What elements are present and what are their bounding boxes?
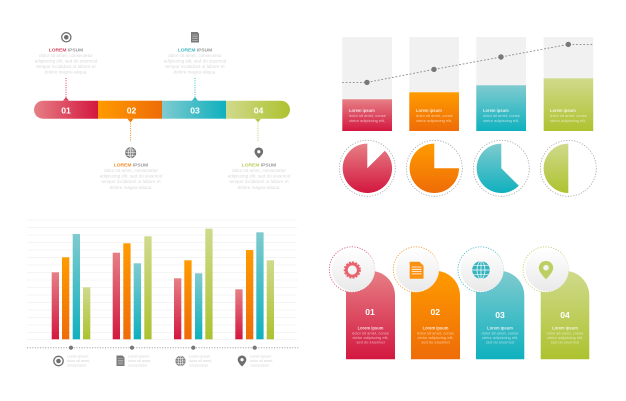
arch card 01: dolor sit amet, conse bbox=[352, 330, 390, 335]
legend item: target bbox=[54, 354, 90, 368]
legend item: map pin: dolor sit amet, bbox=[250, 359, 273, 363]
card 3: Lorem ipsum bbox=[483, 108, 509, 113]
legend item: document bbox=[116, 354, 151, 368]
arch card 02: Lorem ipsum bbox=[423, 326, 449, 330]
card 2: Lorem ipsum bbox=[416, 108, 442, 113]
panel: column cards with trend line bbox=[342, 37, 593, 131]
arch card 02: ctetur adipiscing elit, bbox=[417, 335, 454, 340]
arch card 04: ctetur adipiscing elit, bbox=[547, 335, 583, 340]
arch card 03 bbox=[476, 271, 524, 359]
text block 03: dolore magna aliqua. bbox=[174, 70, 216, 75]
text block 02: tempor incididunt ut labore et bbox=[101, 179, 161, 184]
pie 1 bbox=[339, 140, 395, 196]
legend item: target: dolor sit amet, bbox=[67, 359, 90, 363]
timeline bar bbox=[34, 101, 290, 119]
text block 01 bbox=[35, 47, 98, 75]
pie 4 bbox=[540, 140, 596, 196]
arch card 02 bbox=[411, 271, 460, 359]
connector 04 bbox=[255, 119, 261, 142]
arch card 02: dolor sit amet, conse bbox=[417, 330, 455, 335]
panel: bar chart bbox=[27, 220, 299, 368]
text block 03: LOREM IPSUM bbox=[178, 47, 212, 53]
card 3: ctetur adipiscing elit, bbox=[483, 118, 519, 123]
connector 01 bbox=[63, 78, 69, 101]
icon badge: gear bbox=[329, 247, 375, 292]
card 4: Lorem ipsum bbox=[550, 108, 576, 113]
text block 03: adipiscing elit, sed do eiusmod bbox=[164, 58, 227, 63]
icon: map pin bbox=[254, 148, 263, 158]
arch card 01 bbox=[346, 271, 395, 359]
card 2: ctetur adipiscing elit, bbox=[416, 118, 452, 123]
panel: arch cards bbox=[329, 247, 589, 359]
icon: globe bbox=[126, 148, 136, 158]
card 1 bbox=[342, 37, 392, 131]
icon: document bbox=[191, 32, 199, 42]
arch card 01: ctetur adipiscing elit, bbox=[352, 335, 389, 340]
timeline bar: 03 bbox=[190, 105, 200, 115]
arch card 02: 02 bbox=[431, 307, 440, 317]
card 4: ctetur adipiscing elit, bbox=[550, 118, 586, 123]
legend item: document: Lorem ipsum bbox=[128, 354, 149, 358]
text block 02: dolore magna aliqua. bbox=[110, 185, 152, 190]
timeline bar: 01 bbox=[61, 105, 71, 115]
arch card 01: Lorem ipsum bbox=[358, 326, 384, 330]
arch card 03: Lorem ipsum bbox=[487, 326, 513, 330]
card 1: Lorem ipsum bbox=[349, 108, 375, 113]
text block 04: LOREM IPSUM bbox=[242, 162, 276, 168]
text block 03: tempor incididunt ut labore et bbox=[165, 64, 225, 69]
bars group 1 bbox=[52, 234, 90, 339]
card 2 bbox=[409, 37, 459, 131]
text block 04: tempor incididunt ut labore et bbox=[229, 179, 289, 184]
icon: target bbox=[62, 33, 71, 42]
arch card 03: sed do eiusmod bbox=[486, 340, 514, 345]
panel: timeline bbox=[34, 32, 291, 190]
chart axis bbox=[27, 346, 299, 350]
arch card 03: 03 bbox=[495, 310, 505, 320]
arch card 04: 04 bbox=[560, 310, 570, 320]
connector 03 bbox=[192, 78, 198, 101]
text block 03 bbox=[164, 47, 227, 75]
text block 02: adipiscing elit, sed do eiusmod bbox=[100, 174, 163, 179]
bars group 3 bbox=[174, 229, 213, 339]
icon badge: globe bbox=[458, 247, 504, 292]
text block 04: dolore magna aliqua. bbox=[238, 185, 280, 190]
legend item: map pin bbox=[238, 354, 273, 368]
text block 03: dolor sit amet, consectetur bbox=[168, 53, 222, 58]
arch card 04 bbox=[541, 271, 589, 359]
arch card 04: dolor sit amet, conse bbox=[547, 330, 584, 335]
arch card 01: sed do eiusmod bbox=[356, 340, 385, 345]
arch card 04: Lorem ipsum bbox=[552, 326, 578, 330]
text block 02: LOREM IPSUM bbox=[114, 162, 148, 168]
card 3 bbox=[476, 37, 526, 131]
text block 01: dolore magna aliqua. bbox=[45, 70, 87, 75]
card 2: dolor sit amet, conse bbox=[416, 113, 454, 118]
card 3: dolor sit amet, conse bbox=[483, 113, 521, 118]
card 1: dolor sit amet, conse bbox=[349, 113, 387, 118]
bars group 2 bbox=[113, 236, 152, 339]
text block 04 bbox=[228, 162, 291, 190]
legend item: map pin: Lorem ipsum bbox=[250, 354, 271, 358]
text block 01: LOREM IPSUM bbox=[49, 47, 83, 53]
legend item: target: consectetur bbox=[67, 364, 87, 368]
pie 2 bbox=[406, 140, 462, 196]
text block 02 bbox=[100, 162, 163, 190]
legend item: document: consectetur bbox=[128, 364, 148, 368]
trend line bbox=[342, 42, 593, 85]
legend item: globe: Lorem ipsum bbox=[189, 354, 210, 358]
card 4: dolor sit amet, conse bbox=[550, 113, 588, 118]
legend item: target: Lorem ipsum bbox=[67, 354, 88, 358]
text block 01: tempor incididunt ut labore et bbox=[36, 64, 96, 69]
timeline bar: 02 bbox=[127, 105, 136, 115]
legend item: globe: dolor sit amet, bbox=[189, 359, 212, 363]
text block 04: dolor sit amet, consectetur bbox=[232, 168, 286, 173]
text block 01: adipiscing elit, sed do eiusmod bbox=[35, 58, 98, 63]
arch card 03: ctetur adipiscing elit, bbox=[482, 335, 518, 340]
arch card 02: sed do eiusmod bbox=[421, 340, 450, 345]
card 4 bbox=[544, 37, 593, 131]
text block 01: dolor sit amet, consectetur bbox=[39, 53, 93, 58]
icon badge: document bbox=[393, 247, 439, 292]
legend item: globe: consectetur bbox=[189, 364, 209, 368]
icon badge: map pin bbox=[523, 247, 569, 292]
arch card 04: sed do eiusmod bbox=[551, 340, 579, 345]
text block 04: adipiscing elit, sed do eiusmod bbox=[228, 174, 291, 179]
arch card 03: dolor sit amet, conse bbox=[482, 330, 519, 335]
legend item: globe bbox=[175, 354, 212, 368]
bars group 4 bbox=[235, 232, 274, 339]
connector 02 bbox=[128, 119, 134, 142]
timeline bar: 04 bbox=[254, 105, 263, 115]
legend item: document: dolor sit amet, bbox=[128, 359, 151, 363]
card 1: ctetur adipiscing elit, bbox=[349, 118, 385, 123]
pie 3 bbox=[473, 140, 529, 196]
arch card 01: 01 bbox=[365, 307, 375, 317]
legend item: map pin: consectetur bbox=[250, 364, 270, 368]
text block 02: dolor sit amet, consectetur bbox=[104, 168, 158, 173]
panel: pie charts bbox=[339, 140, 596, 196]
